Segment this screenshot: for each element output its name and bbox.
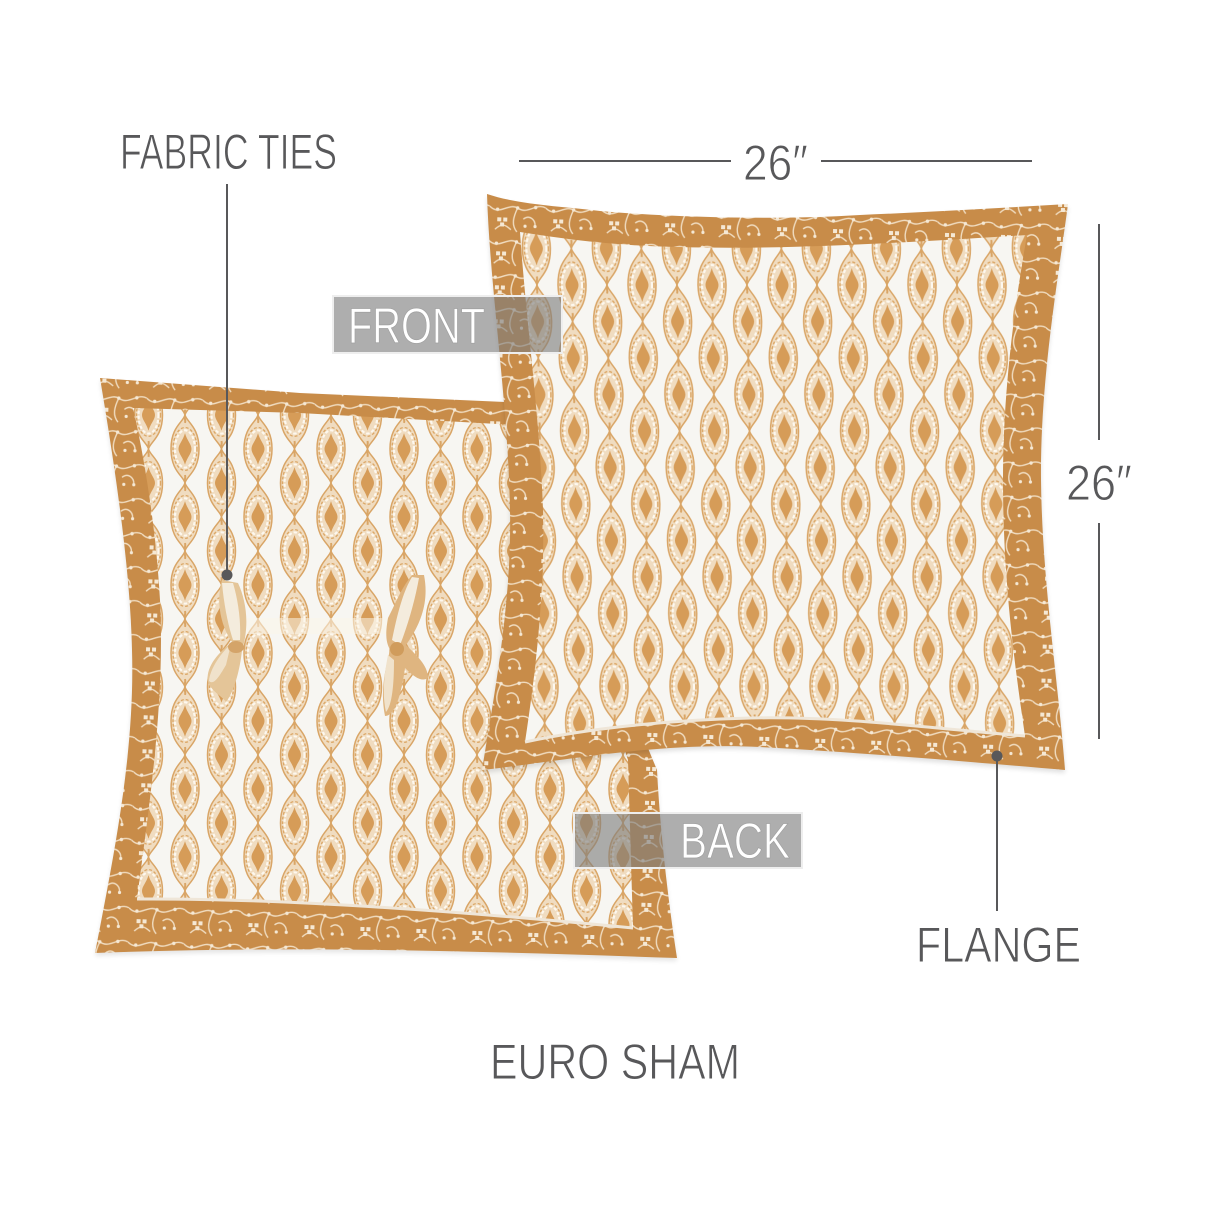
callout: flange <box>916 750 1081 973</box>
callout: fabric ties: FABRIC TIES <box>120 124 337 180</box>
back pillow inner seam <box>137 899 633 928</box>
dimension: width 26 inches: 26″ <box>743 135 808 191</box>
back pillow opening band <box>235 618 400 634</box>
dimension: height 26 inches: 26″ <box>1066 455 1132 511</box>
front pillow patterned field <box>520 232 1027 742</box>
callout: fabric ties <box>120 124 337 580</box>
back pillow shadow <box>95 381 677 961</box>
front pillow inner seam <box>525 718 1025 742</box>
pillow: front of euro sham <box>482 194 1068 773</box>
back pillow flange <box>95 378 677 958</box>
icon: left fabric tie <box>208 580 246 702</box>
front pillow shadow <box>482 197 1068 773</box>
callout: flange: FLANGE <box>916 917 1081 973</box>
title: product name: EURO SHAM <box>490 1034 740 1090</box>
pillow: back of euro sham <box>95 378 677 961</box>
label: FRONT tag: FRONT <box>348 298 485 354</box>
label: BACK tag <box>574 813 802 869</box>
back pillow patterned field <box>133 408 633 928</box>
front pillow flange <box>482 194 1068 770</box>
icon: right fabric tie <box>383 575 428 716</box>
label: BACK tag: BACK <box>680 813 790 869</box>
